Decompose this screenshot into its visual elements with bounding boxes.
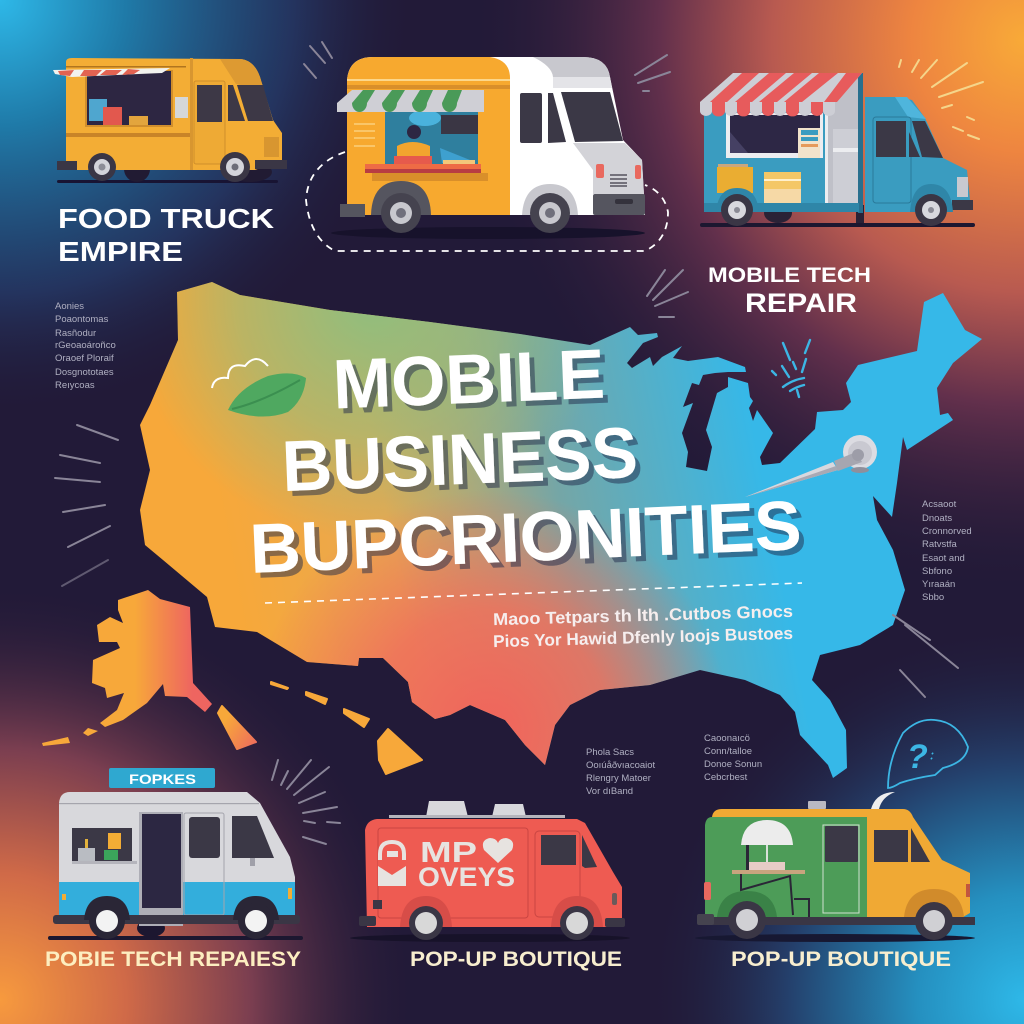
counter (365, 164, 481, 169)
roof units (389, 801, 565, 818)
text block: lower middle notes: Rlengry Matoer (586, 773, 651, 784)
text block: right notes: Yıraaán (922, 579, 955, 590)
title: BUPCRIONITIES (248, 486, 803, 588)
speech bubble: ? (907, 738, 928, 776)
body (347, 57, 645, 215)
truck: red van (350, 801, 630, 942)
map: Hawaii islands (271, 682, 422, 774)
side panel (828, 78, 858, 203)
text block: right notes: Cronnorved (922, 526, 972, 537)
vent lines (354, 124, 375, 146)
text block: lower right notes: Caoonaıcö (704, 733, 750, 744)
wheels (717, 889, 964, 940)
icon: leaf (212, 359, 306, 417)
label: mobile tech repair: MOBILE TECH (708, 264, 871, 287)
subtitle (493, 602, 793, 651)
wheels (84, 896, 279, 939)
truck: yellow food truck (53, 58, 287, 183)
text block: lower middle notes (586, 747, 656, 797)
awning (337, 90, 484, 112)
awning (53, 66, 186, 77)
window (726, 113, 823, 158)
text block: right notes: Sbbo (922, 592, 944, 603)
green door (823, 825, 859, 913)
roof sign: FOPKES (129, 771, 196, 787)
text block: left notes: Oraoef Ploraif (55, 353, 114, 364)
truck: green and yellow van (695, 792, 975, 942)
boxes (717, 167, 753, 193)
labels: bottom row: POP-UP BOUTIQUE (731, 948, 951, 971)
text block: left notes: Rasñodur (55, 328, 96, 339)
text block: right notes: Sbfono (922, 566, 952, 577)
text block: lower right notes: Conn/talloe (704, 746, 752, 757)
text block: left notes: Reıycoas (55, 380, 95, 391)
text block: left notes: Poaontomas (55, 314, 109, 325)
speech bubble (888, 720, 968, 788)
wheels (400, 896, 603, 940)
van lettering: MP (420, 837, 477, 869)
text block: right notes: Esaot and (922, 553, 965, 564)
subtitle: Maoo Tetpars th lth .Cutbos Gnocs (493, 602, 793, 629)
text block: lower middle notes: Phola Sacs (586, 747, 634, 758)
umbrella table (732, 820, 809, 917)
door and windows (535, 831, 580, 917)
awning (700, 73, 862, 116)
truck: center orange and white truck (306, 57, 668, 251)
label: mobile tech repair (708, 264, 871, 318)
label: mobile tech repair: REPAIR (745, 288, 857, 318)
bumpers (359, 916, 376, 926)
title: MOBILE (331, 335, 606, 423)
text block: lower middle notes: Vor dıBand (586, 786, 633, 797)
label: food truck empire (58, 203, 274, 267)
text block: lower middle notes: Ooıúåðvıacoaiot (586, 760, 656, 771)
sparks: yellow burst top right (899, 60, 983, 139)
text block: right notes: Dnoats (922, 513, 952, 524)
wheels (88, 152, 250, 182)
label: food truck empire: EMPIRE (58, 236, 183, 267)
icon: map pin (745, 435, 877, 497)
text block: lower right notes: Donoe Sonun (704, 759, 762, 770)
cab door and windows (873, 117, 973, 210)
van lettering: OVEYS (418, 862, 515, 892)
van lettering (418, 837, 515, 892)
decorative sparks (55, 42, 958, 844)
body (704, 110, 860, 212)
chassis (713, 917, 975, 925)
labels: bottom row (45, 948, 951, 971)
text block: left notes (55, 301, 116, 391)
text block: left notes: Dosgnototaes (55, 367, 114, 378)
subtitle: Pios Yor Hawid Dfenly Ioojs Bustoes (493, 624, 793, 651)
truck: white and blue van (48, 768, 303, 940)
wheels (716, 184, 953, 226)
cab door (184, 813, 224, 915)
service window (72, 828, 137, 864)
bumper (53, 915, 300, 924)
truck: blue mobile tech repair (700, 73, 975, 227)
dashed divider (265, 583, 802, 603)
text block: right notes: Ratvstfa (922, 539, 958, 550)
text block: lower right notes: Cebcrbest (704, 772, 748, 783)
map: Alaska (42, 590, 256, 749)
bumpers (57, 161, 77, 170)
lights and grille (596, 164, 604, 178)
title (248, 335, 803, 588)
text block: left notes: Aonies (55, 301, 84, 312)
bumpers (593, 194, 645, 215)
side door (139, 812, 183, 926)
map: United States (140, 282, 982, 778)
body (59, 792, 295, 915)
text block: left notes: rGeoaoároñco (55, 340, 116, 351)
body (705, 817, 870, 917)
roof sign (109, 768, 215, 788)
text block: right notes: Acsaoot (922, 499, 957, 510)
text block: right notes (922, 499, 972, 603)
sparkle: blue lines above map (772, 340, 810, 397)
serving window (85, 70, 188, 127)
text block: lower right notes (704, 733, 762, 783)
title: BUSINESS (280, 413, 639, 507)
logo (378, 840, 406, 886)
label: food truck empire: FOOD TRUCK (58, 203, 274, 234)
cab door and windows (194, 81, 279, 164)
truck body (66, 58, 282, 170)
labels: bottom row: POBIE TECH REPAIESY (45, 948, 301, 971)
body (365, 819, 622, 927)
wheels (371, 181, 578, 233)
windows (520, 92, 623, 143)
serving hatch (385, 110, 478, 164)
labels: bottom row: POP-UP BOUTIQUE (410, 948, 622, 971)
cab windows (874, 830, 908, 862)
